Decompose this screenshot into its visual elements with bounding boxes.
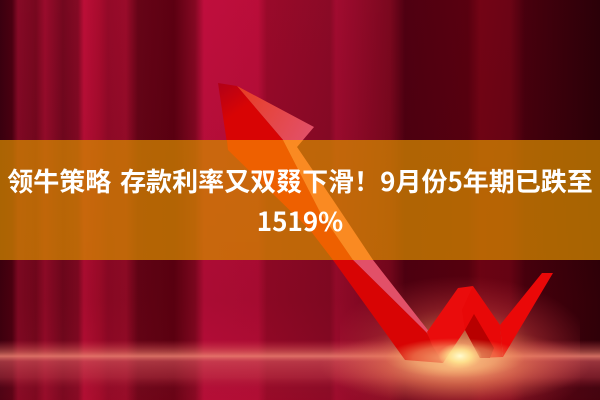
floor glow (320, 325, 590, 400)
arrow main face in band (227, 140, 353, 260)
arrow light face in band (283, 140, 373, 260)
glow core (438, 343, 482, 369)
translucent orange title band (0, 140, 600, 260)
title text: 领牛策略 存款利率又双叕下滑！9月份5年期已跌至 (7, 162, 593, 199)
arrow seen through band (227, 140, 373, 260)
arrow light face (237, 86, 434, 338)
chart line falling upper face (462, 286, 503, 358)
chart line final rise (500, 273, 553, 357)
chart line rising face (427, 286, 473, 363)
arrow main face (218, 83, 443, 363)
chart base glow (385, 338, 525, 378)
chart line inner shadow (465, 314, 494, 358)
title text: 1519% (257, 202, 343, 239)
horizontal light streak (0, 340, 600, 400)
glow behind chart (340, 262, 580, 400)
title text (7, 162, 593, 239)
